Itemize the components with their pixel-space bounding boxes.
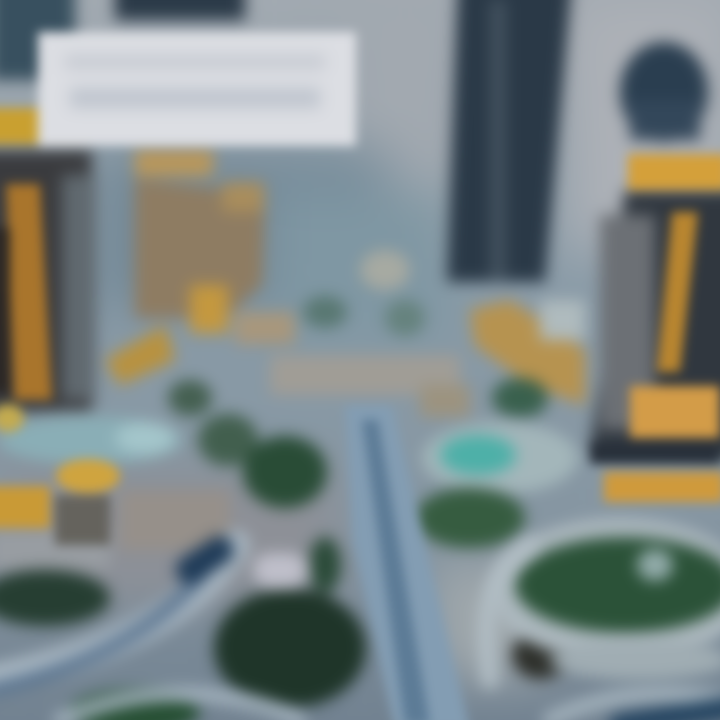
lower right roads <box>486 545 720 720</box>
curved roads lower left <box>0 545 300 720</box>
right gold podium <box>470 300 585 418</box>
top left dark towers <box>0 0 245 80</box>
left lower pool and buildings <box>0 416 230 570</box>
central plaza and bridge <box>270 250 470 417</box>
title placard <box>38 32 356 146</box>
central highway <box>345 405 470 720</box>
right gold tower <box>590 154 720 502</box>
central dark tower <box>447 0 572 282</box>
right domed tower <box>620 42 708 142</box>
circular garden <box>490 518 720 680</box>
green trees centre <box>168 380 327 508</box>
lower green areas <box>0 488 568 720</box>
left gold tower <box>0 108 96 412</box>
central-left amber building <box>105 150 295 385</box>
pool <box>422 422 578 494</box>
